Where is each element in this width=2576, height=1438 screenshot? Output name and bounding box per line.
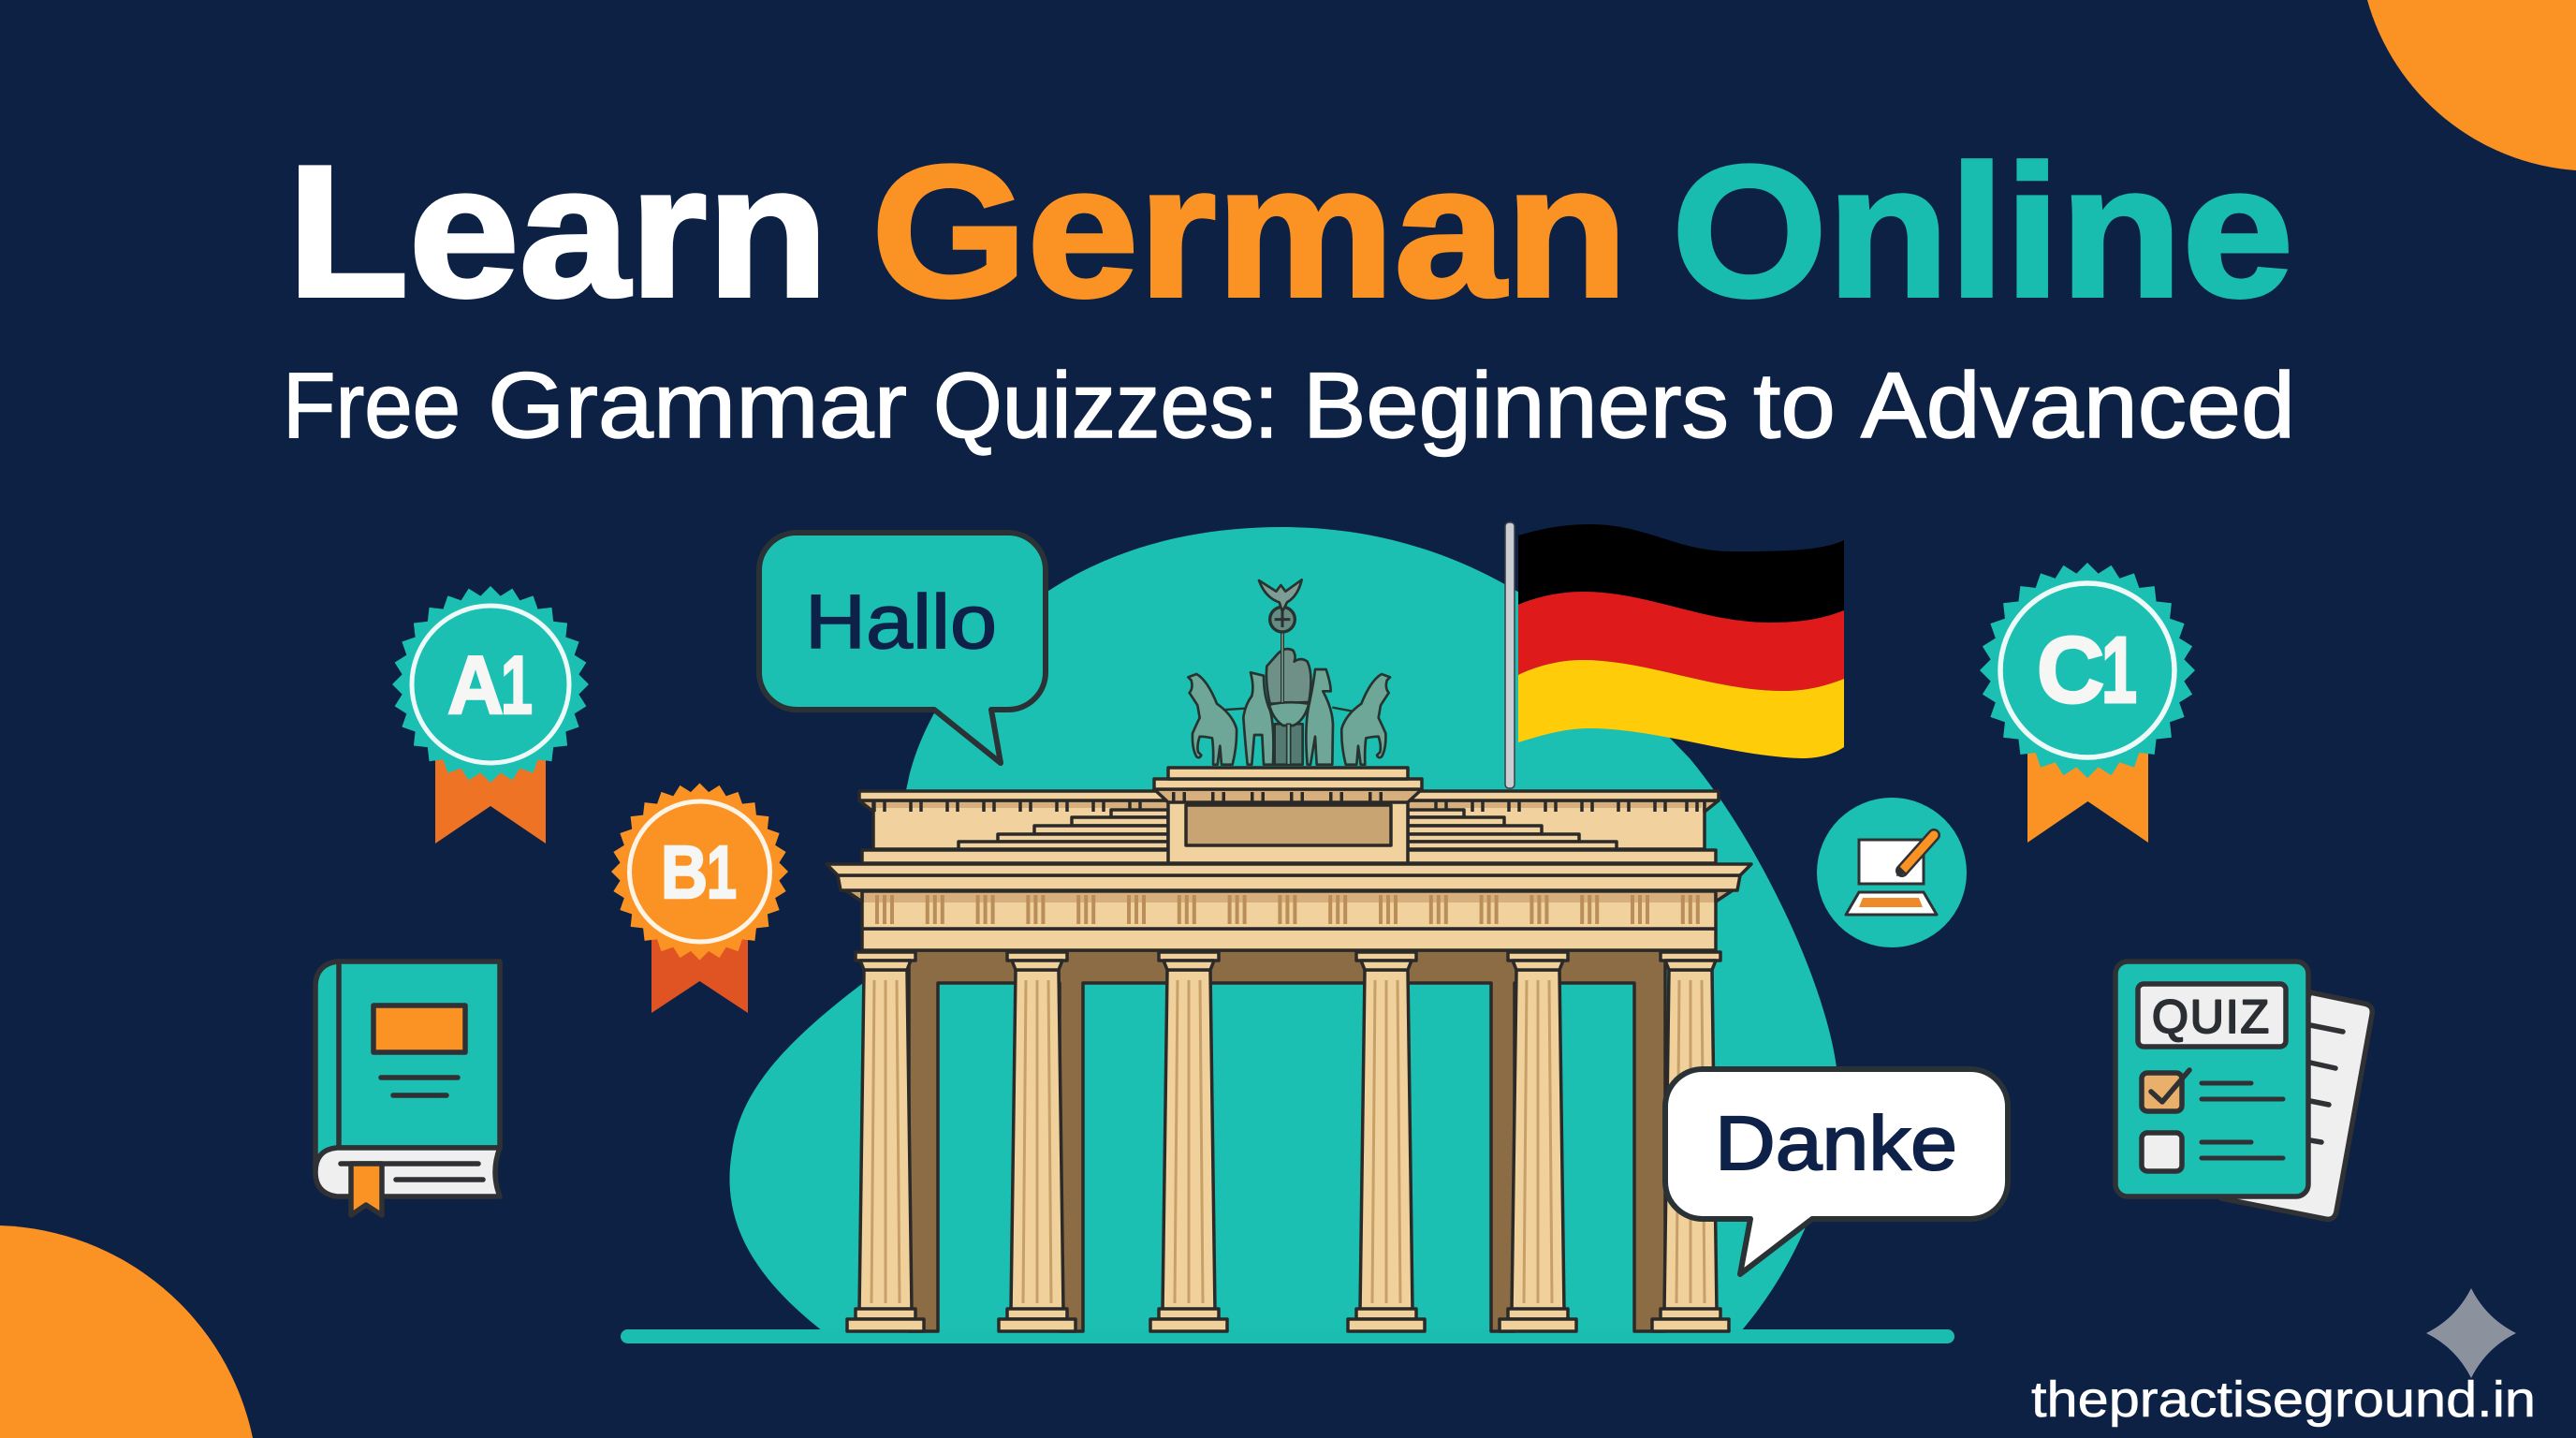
corner circle: bottom left: [0, 1225, 253, 1438]
chariot rods: [1222, 708, 1354, 712]
badge: C1: [1980, 563, 2195, 843]
icon: quiz sheet: QUIZ: [2152, 990, 2269, 1043]
subtitle: Beginners: [1303, 353, 1729, 457]
badge: B1: B: [661, 830, 708, 914]
gate interior piers and lintel: [909, 950, 1665, 1331]
icon: quiz sheet: [2115, 961, 2372, 1219]
title: German: [871, 127, 1628, 336]
icon: laptop with pencil: [1817, 798, 1967, 947]
badge: B1: 1: [707, 830, 737, 914]
icon: book: [315, 961, 500, 1215]
subtitle: Grammar: [488, 353, 907, 457]
outer horses: [1188, 674, 1237, 765]
badge: C1: C: [2037, 618, 2104, 723]
title: [287, 127, 2293, 336]
speech bubble: Danke: Danke: [1715, 1101, 1957, 1186]
subtitle: Advanced: [1861, 353, 2295, 457]
badge: A1: A: [447, 638, 504, 731]
brandenburg gate: [827, 768, 1751, 1331]
badge: A1: 1: [501, 638, 533, 731]
title: Learn: [287, 127, 828, 336]
subtitle: Free: [283, 353, 461, 457]
speech bubble: Hallo: Hallo: [805, 580, 997, 665]
speech bubble: Hallo: [759, 533, 1046, 763]
german flag: [1518, 524, 1844, 758]
subtitle: Quizzes:: [933, 353, 1279, 457]
columns: [847, 952, 1729, 1331]
subtitle: to: [1753, 353, 1836, 457]
chariot body: [1269, 702, 1309, 765]
inner left horse: [1243, 672, 1273, 765]
speech bubble: Danke: [1665, 1069, 2008, 1274]
icon: sparkle: [2426, 1288, 2516, 1378]
badge: C1: 1: [2101, 618, 2137, 723]
website credit: thepractiseground.in: [2031, 1372, 2536, 1428]
attic with stepped roof: [859, 791, 1719, 863]
corner circle: top right: [2367, 0, 2576, 170]
inner right horse: [1306, 669, 1333, 765]
central plinth and plaque: [1154, 768, 1422, 863]
subtitle: [283, 353, 2295, 457]
title: Online: [1672, 127, 2293, 336]
entablature and frieze: [827, 864, 1751, 950]
charioteer: [1266, 649, 1310, 704]
flag pole: [1505, 522, 1515, 788]
ground bar: [621, 1329, 1954, 1343]
badge: B1: [611, 784, 788, 1013]
teal blob behind gate: [729, 527, 1837, 1331]
staff with wreath and eagle: [1259, 580, 1302, 702]
quadriga statue: [1188, 580, 1390, 765]
badge: A1: [392, 586, 589, 844]
